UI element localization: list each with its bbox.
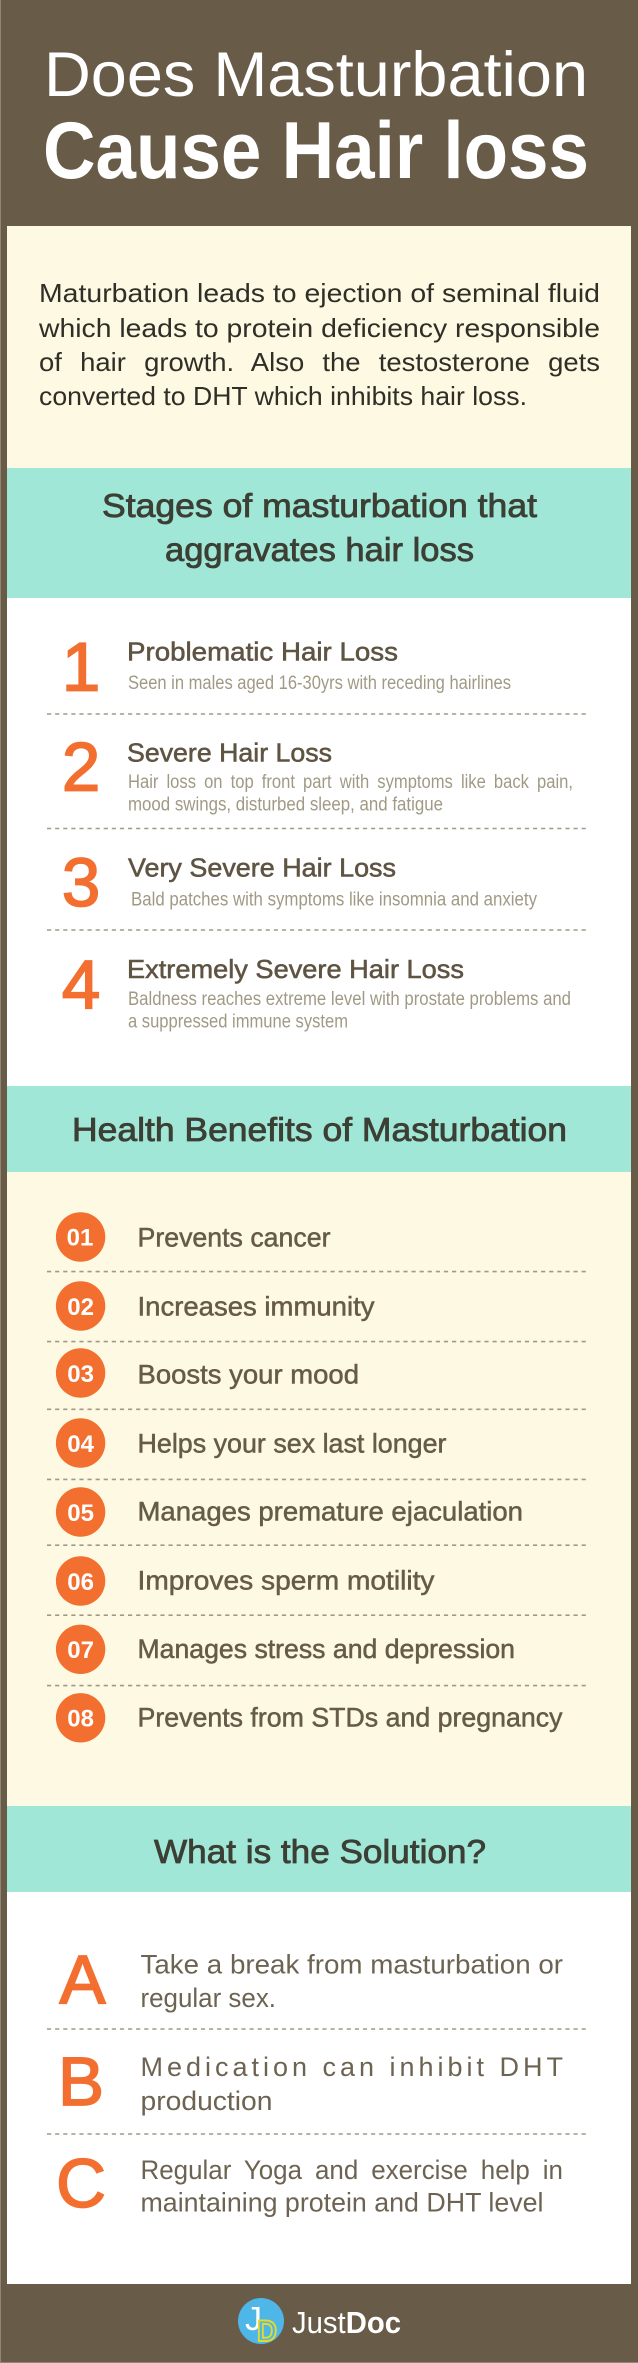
intro text: converted to DHT which inhibits hair loss. xyxy=(39,381,527,411)
solution A xyxy=(59,1942,563,2018)
solution C xyxy=(56,2145,563,2222)
solution A: A xyxy=(59,1942,106,2018)
solution A: regular sex. xyxy=(140,1983,276,2013)
benefit 08 xyxy=(56,1693,563,1743)
stage 4: 4 xyxy=(62,946,100,1023)
panel: stages list xyxy=(7,598,631,1086)
stage 4: a suppressed immune system xyxy=(128,1012,348,1032)
panel: benefits heading xyxy=(7,1086,631,1172)
benefit 07: Manages stress and depression xyxy=(138,1634,515,1664)
heading: health benefits: Health Benefits of Masturbation xyxy=(72,1111,567,1148)
benefit 08: 08 xyxy=(67,1706,94,1733)
panel: solution heading xyxy=(7,1806,631,1892)
benefit 05: 05 xyxy=(67,1500,94,1527)
benefit 01: 01 xyxy=(67,1224,93,1252)
benefit 07 xyxy=(56,1625,515,1674)
panel: introduction xyxy=(7,226,631,468)
title: Does Masturbation xyxy=(44,40,588,110)
benefit 05: Manages premature ejaculation xyxy=(138,1497,523,1527)
solution C: Regular Yoga and exercise help in xyxy=(140,2155,563,2185)
footer xyxy=(1,2284,638,2362)
stage 4: Extremely Severe Hair Loss xyxy=(127,954,464,984)
benefit 08: Prevents from STDs and pregnancy xyxy=(138,1703,563,1733)
benefit 03: Boosts your mood xyxy=(138,1360,359,1390)
intro text: which leads to protein deficiency responsible xyxy=(38,313,600,343)
stage 3 xyxy=(62,844,537,921)
benefit 01: Prevents cancer xyxy=(138,1223,331,1253)
intro text xyxy=(38,278,600,411)
solution B: production xyxy=(140,2086,272,2116)
brand name: JustDoc xyxy=(292,2305,401,2340)
benefit 06 xyxy=(56,1556,435,1606)
solution B: Medication can inhibit DHT xyxy=(140,2052,563,2082)
benefit 05 xyxy=(56,1487,523,1537)
stage 4: Baldness reaches extreme level with prostate problems and xyxy=(128,989,571,1010)
solution A: Take a break from masturbation or xyxy=(140,1950,563,1980)
benefit 06: 06 xyxy=(67,1569,94,1596)
benefit 02: Increases immunity xyxy=(138,1292,375,1322)
stage 2: mood swings, disturbed sleep, and fatigue xyxy=(128,794,443,816)
stage 1: Seen in males aged 16-30yrs with receding hairlines xyxy=(128,673,511,694)
header xyxy=(1,0,638,226)
title xyxy=(43,40,589,196)
stage 2: Hair loss on top front part with symptoms like back pain, xyxy=(128,772,573,793)
stage 3: Very Severe Hair Loss xyxy=(128,852,396,882)
title: Cause Hair loss xyxy=(43,106,589,196)
benefit 01 xyxy=(56,1212,331,1262)
icon: JustDoc logo xyxy=(238,2298,284,2348)
icon: JustDoc logo: J xyxy=(245,2300,262,2337)
benefit 04 xyxy=(56,1418,447,1468)
benefit 03: 03 xyxy=(67,1361,94,1388)
heading: stages xyxy=(102,487,537,568)
panel: benefits list xyxy=(7,1172,631,1806)
heading: solution: What is the Solution? xyxy=(154,1833,486,1870)
stage 2: Severe Hair Loss xyxy=(127,738,332,768)
solution B xyxy=(58,2043,563,2120)
stage 1 xyxy=(62,628,511,706)
panel: stages heading xyxy=(7,468,631,598)
intro text: Maturbation leads to ejection of seminal fluid xyxy=(39,278,600,308)
intro text: of hair growth. Also the testosterone gets xyxy=(39,347,600,377)
benefit 02: 02 xyxy=(67,1294,94,1321)
stage 4 xyxy=(62,946,571,1032)
benefit 04: 04 xyxy=(67,1431,95,1458)
benefit 07: 07 xyxy=(67,1637,94,1664)
panel: solution list xyxy=(7,1892,631,2284)
stage 2: 2 xyxy=(62,728,100,806)
solution C: C xyxy=(56,2145,106,2222)
heading: stages: Stages of masturbation that xyxy=(102,487,537,524)
benefit 06: Improves sperm motility xyxy=(138,1566,435,1596)
heading: stages: aggravates hair loss xyxy=(165,531,474,568)
benefit 02 xyxy=(56,1281,375,1331)
solution C: maintaining protein and DHT level xyxy=(140,2188,544,2218)
stage 3: 3 xyxy=(62,844,100,921)
solution B: B xyxy=(58,2043,104,2120)
benefit 03 xyxy=(56,1348,359,1398)
benefit 04: Helps your sex last longer xyxy=(138,1429,447,1459)
stage 1: 1 xyxy=(62,628,100,706)
stage 3: Bald patches with symptoms like insomnia and anxiety xyxy=(131,890,537,910)
stage 2 xyxy=(62,728,573,816)
icon: JustDoc logo: D xyxy=(257,2315,277,2348)
stage 1: Problematic Hair Loss xyxy=(127,636,398,666)
